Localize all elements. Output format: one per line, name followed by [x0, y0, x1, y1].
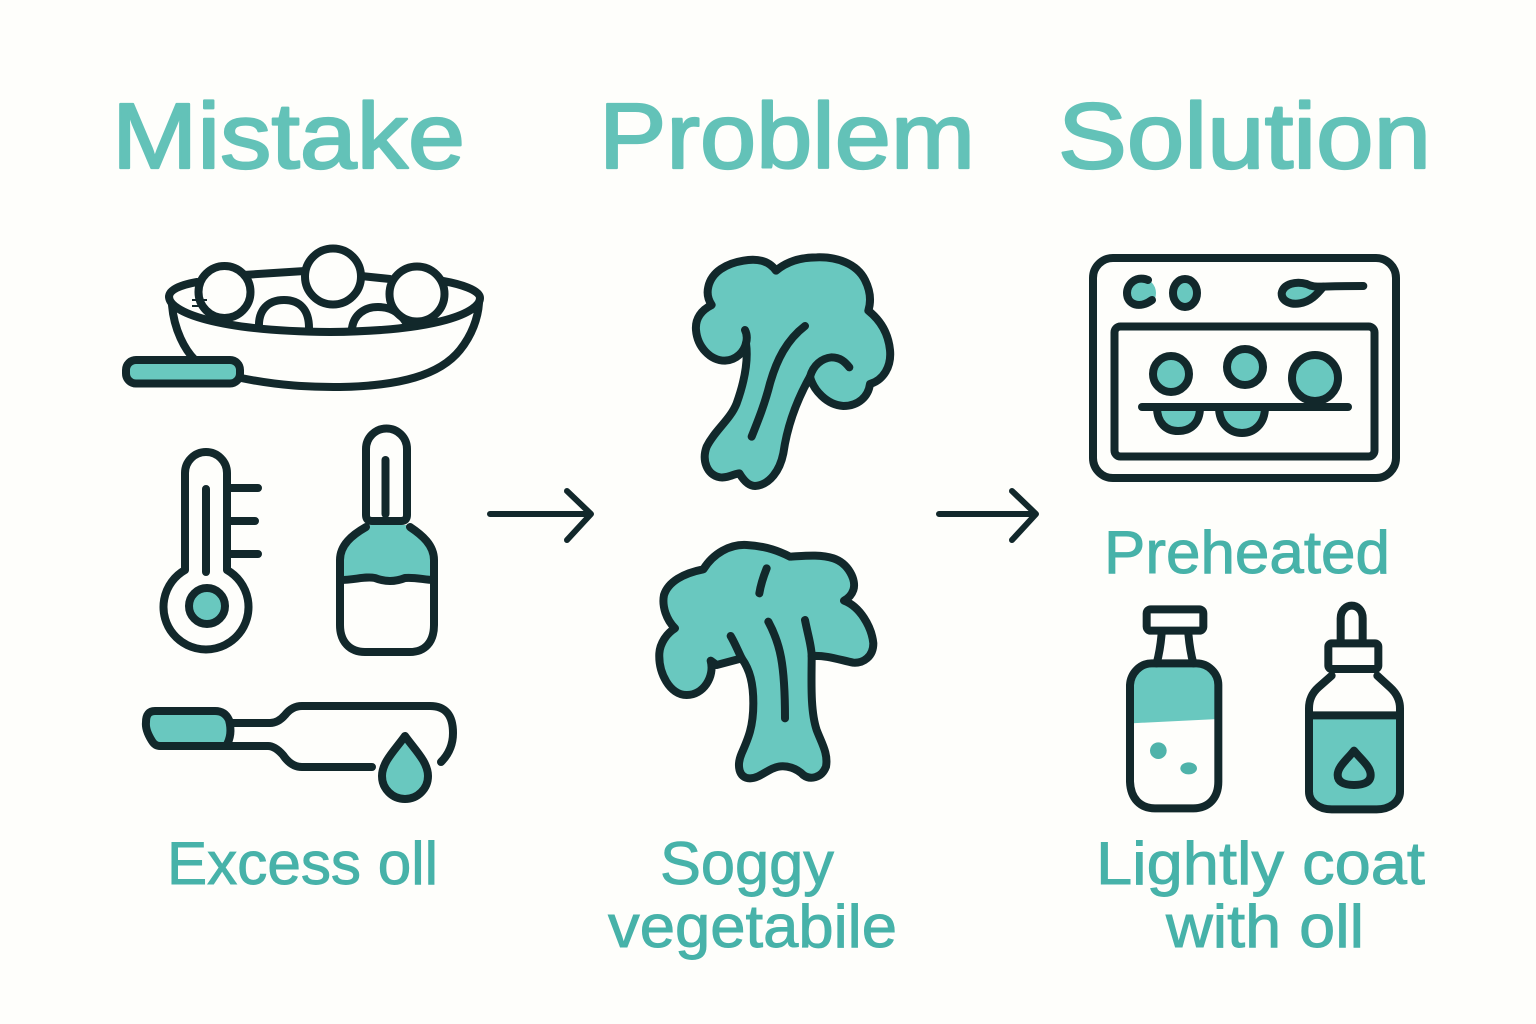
label: Soggy vegetabile: [608, 830, 897, 960]
heading: Problem: Problem: [599, 84, 975, 188]
icon: dropper bottle: [1309, 606, 1400, 809]
arrow: problem to solution: [939, 491, 1036, 540]
label: Soggy vegetabile: Soggy: [660, 830, 834, 897]
icon: thermometer: [163, 452, 258, 649]
label: Lightly coat with oll: with oll: [1165, 893, 1364, 960]
heading: Mistake: Mistake: [112, 84, 465, 188]
panel: mistake column: [112, 84, 480, 897]
arrow: mistake to problem: [490, 491, 591, 540]
icon: spoon pouring oil drop: [146, 706, 453, 799]
label: Preheated: Preheated: [1104, 519, 1390, 586]
panel: solution column: [1058, 84, 1431, 960]
panel: problem column: [599, 84, 975, 960]
heading: Solution: Solution: [1058, 84, 1431, 188]
icon: limp broccoli, drooping: [696, 257, 890, 486]
icon: limp broccoli, upright: [659, 545, 873, 778]
label: Lightly coat with oll: [1096, 830, 1425, 960]
icon: oil bottle with droplets: [1130, 609, 1218, 808]
label: Soggy vegetabile: vegetabile: [608, 893, 897, 960]
icon: preheated oven: [1093, 258, 1396, 478]
label: Lightly coat with oll: Lightly coat: [1096, 830, 1425, 897]
label: Excess oll: Excess oll: [167, 830, 438, 897]
icon: oil bottle: [340, 428, 434, 652]
icon: frying pan with food balls: [126, 248, 480, 387]
